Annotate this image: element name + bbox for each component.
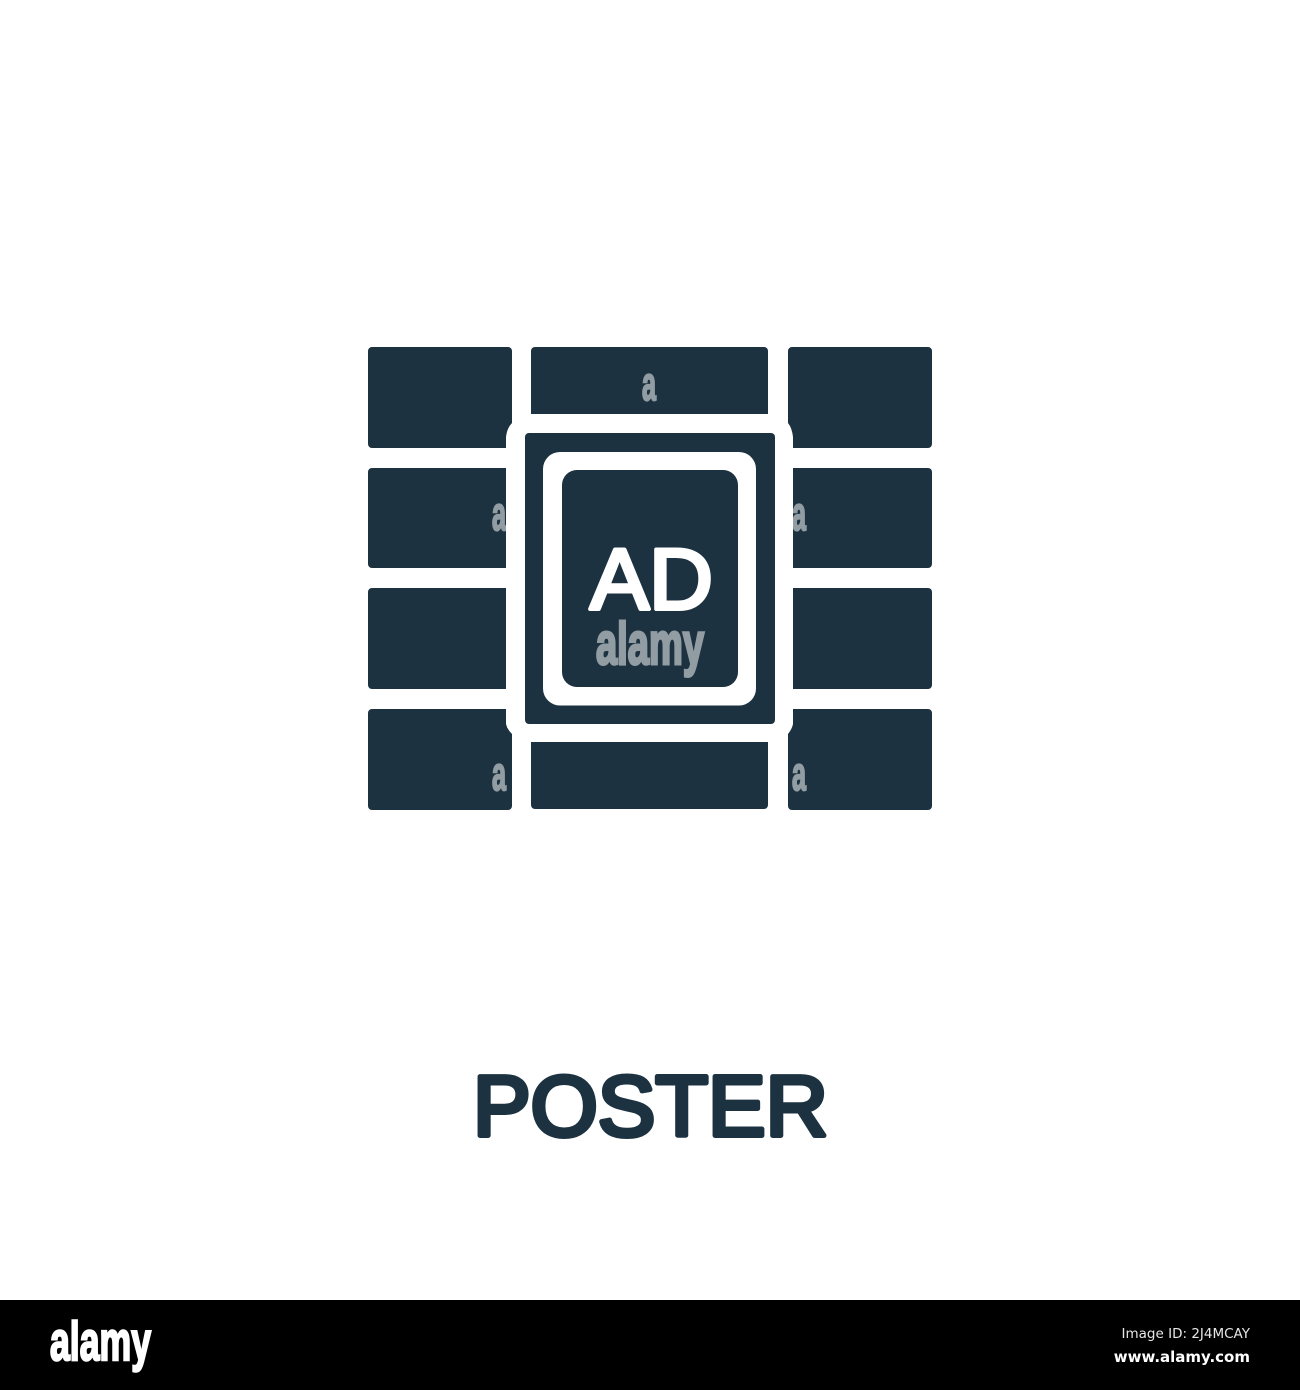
watermark: lower left brick a: a — [492, 747, 506, 800]
centre wall bricks — [531, 347, 768, 809]
right column of wall bricks — [788, 347, 932, 810]
footer bar — [0, 1300, 1300, 1390]
poster label: AD: AD — [590, 532, 713, 628]
left column of wall bricks — [368, 347, 512, 810]
title: POSTER: POSTER — [473, 1060, 828, 1154]
footer url: www.alamy.com — [1114, 1348, 1250, 1366]
watermark: lower right brick a: a — [792, 747, 806, 800]
poster frame — [525, 433, 775, 724]
watermark: alamy centre: alamy — [596, 611, 704, 677]
footer logo: alamy: alamy — [50, 1310, 151, 1372]
footer image id: Image ID: 2J4MCAY — [1122, 1326, 1251, 1342]
icon: poster on brick wall — [368, 347, 932, 810]
poster inner border — [543, 452, 756, 706]
poster inner panel — [562, 470, 738, 687]
watermark: top brick a: a — [642, 357, 656, 410]
